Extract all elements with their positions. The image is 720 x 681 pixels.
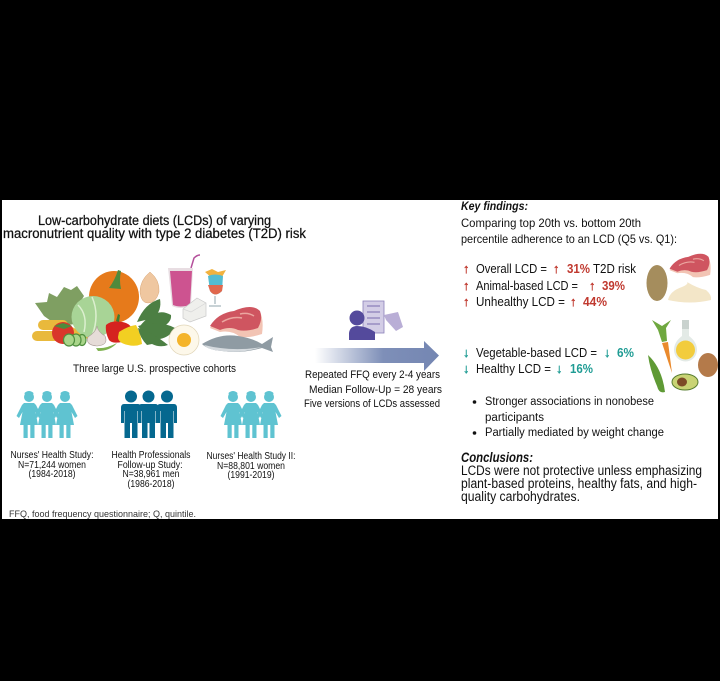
- icon: nurses group 1: [16, 391, 78, 438]
- beneficial LCD findings: ↓: [604, 345, 610, 360]
- icon: tomato: [52, 322, 74, 344]
- harmful LCD findings: ↑: [463, 261, 470, 276]
- harmful LCD findings: Overall LCD =: [476, 261, 547, 276]
- icon: cucumbers: [64, 334, 86, 346]
- follow-up text: Median Follow-Up = 28 years: [309, 384, 442, 396]
- harmful LCD findings: ↑: [570, 294, 576, 309]
- beneficial LCD findings: ↓: [463, 361, 470, 376]
- icon: carrot: [652, 320, 672, 373]
- harmful LCD findings: 44%: [583, 294, 607, 309]
- harmful LCD findings: ↑: [463, 278, 470, 293]
- beneficial LCD findings: 16%: [570, 361, 593, 376]
- beneficial LCD findings: [463, 345, 634, 376]
- follow-up text: Five versions of LCDs assessed: [304, 398, 440, 410]
- conclusions: Conclusions:: [461, 450, 533, 465]
- icon: spinach: [137, 299, 175, 346]
- icon: fish: [202, 335, 273, 352]
- icon: green bean: [648, 355, 665, 392]
- cohort label: Nurses' Health Study II: (1991-2019): [228, 470, 274, 481]
- key findings heading: Key findings:: [461, 199, 528, 213]
- harmful LCD findings: T2D risk: [593, 261, 636, 276]
- cohort label: Health Professionals Follow-up Study: Health Professionals: [112, 450, 191, 461]
- white panel: [2, 200, 718, 519]
- cohort label: Health Professionals Follow-up Study: Follow-up Study:: [118, 460, 182, 471]
- icon: cabbage: [72, 296, 114, 338]
- title: Low-carbohydrate diets (LCDs) of varying: [38, 213, 271, 228]
- harmful LCD findings: [463, 261, 636, 309]
- cohort label: Nurses' Health Study: [10, 450, 94, 480]
- footnote: FFQ, food frequency questionnaire; Q, quintile.: [9, 509, 196, 520]
- key findings heading: percentile adherence to an LCD (Q5 vs. Q1):: [461, 232, 677, 246]
- icon: smoothie: [168, 255, 200, 308]
- title: macronutrient quality with type 2 diabetes (T2D) risk: [3, 226, 306, 241]
- icon: cocktail: [205, 269, 226, 306]
- icon: egg: [169, 325, 199, 355]
- harmful LCD findings: Unhealthy LCD =: [476, 294, 565, 309]
- icon: sugar cube: [183, 298, 206, 322]
- title: [3, 213, 306, 241]
- beneficial LCD findings: Vegetable-based LCD =: [476, 345, 597, 360]
- cohorts heading: Three large U.S. prospective cohorts: [73, 363, 236, 375]
- cohort label: Nurses' Health Study: (1984-2018): [28, 469, 76, 480]
- beneficial LCD findings: ↓: [463, 345, 470, 360]
- icon: avocado: [672, 374, 698, 390]
- key findings heading: Comparing top 20th vs. bottom 20th: [461, 216, 641, 230]
- icon: yellow pepper: [118, 325, 142, 346]
- icon: potato: [646, 265, 668, 301]
- icon: almond: [140, 272, 159, 303]
- bullet points: [473, 396, 664, 439]
- cohort label: Nurses' Health Study: Nurses' Health Study:: [10, 450, 94, 461]
- conclusions: plant-based proteins, healthy fats, and high-: [461, 476, 697, 491]
- cohort label: Health Professionals Follow-up Study: [112, 450, 191, 490]
- harmful LCD findings: 39%: [602, 278, 625, 293]
- icon: red pepper: [106, 314, 131, 343]
- illustration: potato, meat, mayonnaise: [646, 254, 711, 302]
- icon: meat: [670, 254, 711, 277]
- icon: mayonnaise: [668, 282, 711, 302]
- arrow: [315, 341, 439, 371]
- icon: nurses group 2: [220, 391, 282, 438]
- bullet points: participants: [485, 412, 544, 424]
- harmful LCD findings: ↑: [589, 278, 596, 293]
- cohort label: Health Professionals Follow-up Study: (1986-2018): [128, 479, 174, 490]
- harmful LCD findings: ↑: [463, 294, 470, 309]
- icon: walnut: [698, 353, 718, 377]
- icon: person with questionnaire: [349, 301, 403, 340]
- harmful LCD findings: Animal-based LCD =: [476, 278, 578, 293]
- conclusions: [461, 450, 702, 504]
- beneficial LCD findings: Healthy LCD =: [476, 361, 551, 376]
- key findings heading: [461, 199, 677, 246]
- follow-up text: [304, 369, 442, 410]
- cohort label: Nurses' Health Study: N=71,244 women: [18, 460, 86, 471]
- beneficial LCD findings: 6%: [617, 345, 634, 360]
- cohort label: Nurses' Health Study II: Nurses' Health Study II:: [206, 451, 296, 462]
- follow-up text: Repeated FFQ every 2-4 years: [305, 369, 440, 381]
- harmful LCD findings: 31%: [567, 261, 590, 276]
- icon: oil bottle: [674, 320, 697, 362]
- icon: health professionals group: [121, 390, 177, 438]
- cohort label: Nurses' Health Study II: [206, 451, 296, 481]
- bullet points: Stronger associations in nonobese: [485, 396, 654, 408]
- illustration: carrot, oil, walnut, bean, avocado: [648, 320, 718, 392]
- food illustration: [32, 255, 273, 355]
- cohort label: Health Professionals Follow-up Study: N=38,961 men: [122, 469, 180, 480]
- icon: leafy greens: [35, 286, 84, 326]
- bullet points: Partially mediated by weight change: [485, 427, 664, 439]
- icon: garlic: [87, 326, 106, 346]
- beneficial LCD findings: ↓: [556, 361, 562, 376]
- harmful LCD findings: ↑: [553, 261, 560, 276]
- icon: pea pod: [96, 343, 117, 351]
- icon: pumpkin: [89, 270, 139, 323]
- icon: meat: [210, 307, 263, 337]
- cohort label: Nurses' Health Study II: N=88,801 women: [217, 461, 285, 472]
- conclusions: quality carbohydrates.: [461, 489, 580, 504]
- icon: corn: [32, 320, 90, 341]
